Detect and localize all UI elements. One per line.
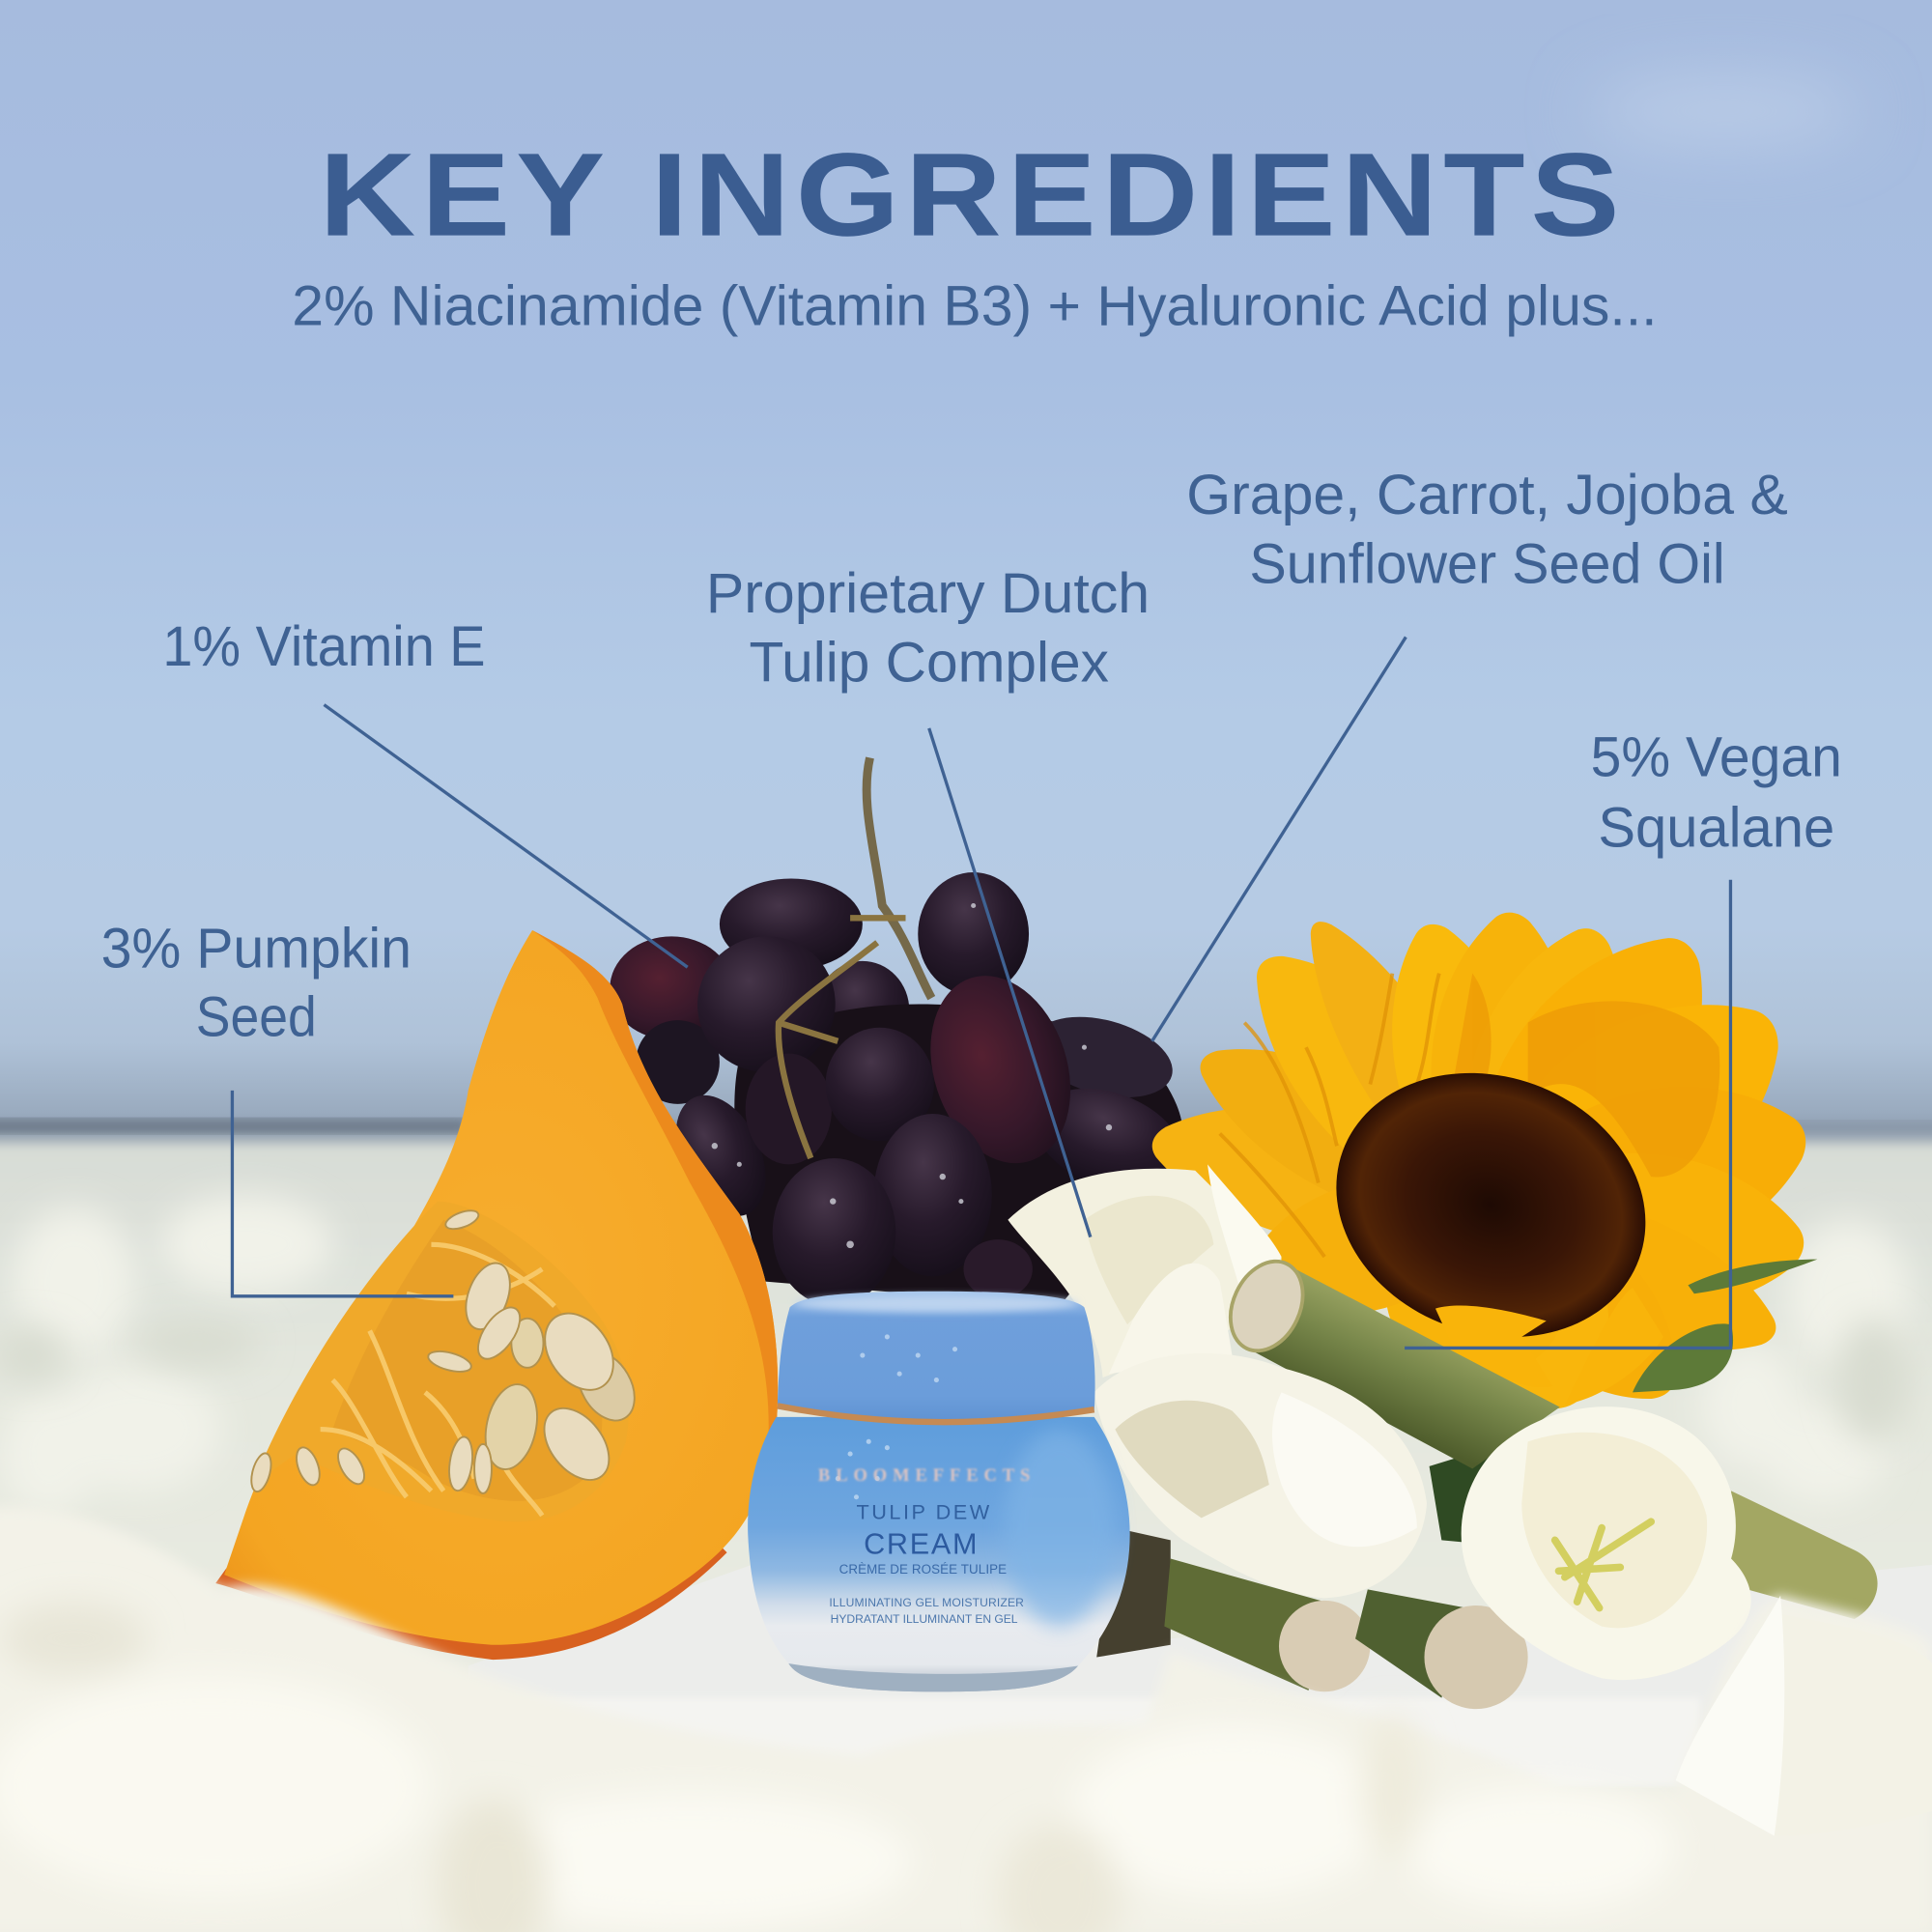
product: Tulip Dew Cream jar [748, 1292, 1130, 1691]
illustration: cut stem [1217, 1250, 1560, 1468]
callout: Grape, Carrot, Jojoba and Sunflower Seed Oil: Grape, Carrot, Jojoba & [1186, 464, 1788, 526]
gold band [778, 1406, 1094, 1422]
arrow: 1% Vitamin E leader [324, 705, 688, 967]
product: Tulip Dew Cream jar: CREAM [864, 1527, 977, 1560]
callout: Proprietary Dutch Tulip Complex: Proprietary Dutch [706, 562, 1150, 625]
arrow: Grape, Carrot, Jojoba and Sunflower Seed Oil leader [1152, 637, 1406, 1041]
jar lid [778, 1292, 1095, 1422]
callout: Proprietary Dutch Tulip Complex [706, 562, 1150, 694]
callout: Proprietary Dutch Tulip Complex: Tulip Complex [750, 631, 1109, 694]
callout: 1% Vitamin E: 1% Vitamin E [162, 615, 486, 678]
arrow: 3% Pumpkin Seed leader [232, 1091, 453, 1296]
callout: Grape, Carrot, Jojoba and Sunflower Seed Oil: Sunflower Seed Oil [1249, 532, 1725, 595]
pumpkin cavity [252, 1202, 629, 1521]
tulip stamen [1555, 1521, 1651, 1608]
white display table [469, 1528, 1932, 1786]
illustration: white tulip centre [1094, 1353, 1427, 1598]
stem: upper grape stalk [867, 757, 931, 998]
product: Tulip Dew Cream jar: CRÈME DE ROSÉE TULIPE [839, 1562, 1007, 1577]
callout: Grape, Carrot, Jojoba and Sunflower Seed Oil [1186, 464, 1788, 595]
product: Tulip Dew Cream jar: HYDRATANT ILLUMINANT EN GEL [831, 1612, 1018, 1626]
title: KEY INGREDIENTS [319, 128, 1625, 261]
jar label text: BLOOMEFFECTS [818, 1465, 1030, 1485]
foreground: blurred white tulips [0, 1507, 1932, 1932]
product: Tulip Dew Cream jar: TULIP DEW [856, 1500, 990, 1524]
callout: 5% Vegan Squalane: 5% Vegan [1591, 726, 1842, 789]
illustration: pumpkin wedge [215, 930, 778, 1660]
water droplets [836, 1334, 957, 1499]
arrow: 5% Vegan Squalane leader [1405, 880, 1730, 1348]
subtitle: 2% Niacinamide (Vitamin B3) + Hyaluronic Acid plus... [292, 275, 1658, 338]
background: blurred white tulip field [0, 1141, 1932, 1932]
illustration: white tulip open [1462, 1406, 1751, 1680]
jar body [748, 1417, 1130, 1691]
illustration: sunflower [1140, 895, 1825, 1436]
arrow: Proprietary Dutch Tulip Complex leader [929, 728, 1091, 1237]
background: blue sky [0, 0, 1932, 1158]
illustration: lower stems [1164, 1559, 1528, 1709]
callout: 3% Pumpkin Seed: 3% Pumpkin [101, 917, 412, 980]
illustration: white tulip upper left [1008, 1164, 1282, 1378]
callout: 3% Pumpkin Seed: Seed [196, 986, 317, 1049]
callout: 5% Vegan Squalane: Squalane [1598, 796, 1834, 859]
illustration: grape cluster [610, 757, 1197, 1306]
product: Tulip Dew Cream jar: ILLUMINATING GEL MOISTURIZER [829, 1596, 1024, 1609]
illustration: back stem piece [1725, 1491, 1878, 1619]
stem: lower grape stalk [779, 918, 906, 1158]
callout leader lines [232, 637, 1730, 1348]
sunflower leaves [1633, 1260, 1817, 1392]
pumpkin seeds [248, 1207, 646, 1493]
callout: 3% Pumpkin Seed [101, 917, 412, 1049]
callout: 5% Vegan Squalane [1591, 726, 1842, 859]
